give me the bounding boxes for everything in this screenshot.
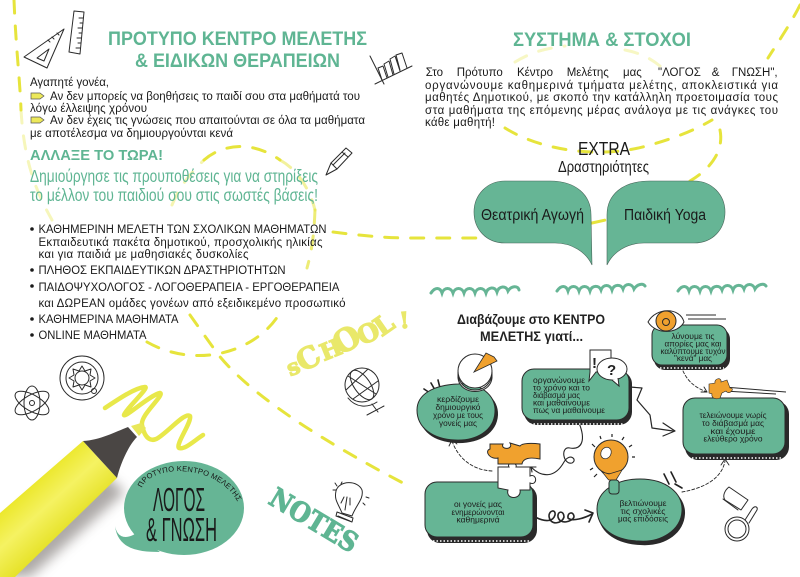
heading: change it now: ΑΛΛΑΞΕ ΤΟ ΤΩΡΑ! xyxy=(30,147,163,164)
flow node: solve questions xyxy=(652,325,730,370)
icon: sun in orbit xyxy=(60,356,104,400)
icon: ruler xyxy=(69,11,84,54)
flow node: organise time: το χρόνο και το xyxy=(533,384,591,392)
icon: set square xyxy=(24,29,64,68)
icon: speech bubbles with marks: ? xyxy=(607,362,616,379)
flow node: improve performance xyxy=(597,472,685,545)
decorative word: school: L xyxy=(368,308,401,343)
logo speech bubble xyxy=(115,461,244,555)
text block: system and goals: Στο xyxy=(426,67,443,79)
flow node: parents informed: οι γονείς μας xyxy=(454,500,502,509)
flow arrows xyxy=(449,371,729,523)
flow node: creative time with parents: γονείς μας xyxy=(439,419,477,428)
flow node: solve questions: απορίες μας και xyxy=(664,340,722,348)
extra activities heading xyxy=(558,139,649,176)
decorative word: school: ! xyxy=(398,308,410,334)
flowchart heading: Διαβάζουμε στο ΚΕΝΤΡΟ xyxy=(457,311,605,327)
title: left page xyxy=(108,29,367,72)
handwritten call to action: το μέλλον του παιδιού σου στις σωστές βάσεις! xyxy=(30,185,318,205)
text block: address to parents: Αν δεν μπορείς να βοηθήσεις το παιδί σου στα μαθήματά του xyxy=(50,91,360,103)
title: right page: ΣΥΣΤΗΜΑ & ΣΤΟΧΟΙ xyxy=(513,30,691,51)
flow node: improve performance: τις σχολικές xyxy=(620,507,666,516)
flow node: finish early: και έχουμε xyxy=(710,427,756,436)
services bullet list: ΚΑΘΗΜΕΡΙΝΗ ΜΕΛΕΤΗ ΤΩΝ ΣΧΟΛΙΚΩΝ ΜΑΘΗΜΑΤΩΝ xyxy=(38,224,326,236)
flow node: solve questions: λύνουμε τις xyxy=(672,332,715,341)
text block: system and goals: κάθε μαθητή! xyxy=(425,117,495,129)
text block: system and goals: Πρότυπο xyxy=(457,67,503,79)
flow node: solve questions: καλύπτουμε τυχόν xyxy=(660,347,726,356)
speech bubble: kids yoga: Παιδική Yoga xyxy=(624,207,706,224)
text block: system and goals: Μελέτης xyxy=(567,67,609,79)
highlighter scribble xyxy=(105,387,203,448)
flow node: creative time with parents: δημιουργικό xyxy=(436,403,481,412)
services bullet list: Εκπαιδευτικά πακέτα δημοτικού, προσχολικής ηλικίας xyxy=(38,237,323,249)
flowchart heading: ΜΕΛΕΤΗΣ γιατί... xyxy=(480,328,583,344)
flow node: finish early: τελειώνουμε νωρίς xyxy=(700,411,767,420)
flow node: finish early xyxy=(683,387,789,460)
services bullet list: ΚΑΘΗΜΕΡΙΝΑ ΜΑΘΗΜΑΤΑ xyxy=(38,314,179,326)
flow node: parents informed: ενημερώνονται xyxy=(452,508,505,517)
decorative word: school: C xyxy=(290,338,326,379)
extra activities heading: Δραστηριότητες xyxy=(558,159,649,176)
flow node: finish early: το διάβασμά μας xyxy=(702,419,764,428)
flow node: creative time with parents xyxy=(417,380,498,443)
logo speech bubble: ΠΡΟΤΥΠΟ ΚΕΝΤΡΟ ΜΕΛΕΤΗΣ xyxy=(138,466,242,502)
services bullet list: και για παιδιά με μαθησιακές δυσκολίες xyxy=(38,249,249,261)
text block: address to parents: Αγαπητέ γονέα, xyxy=(30,77,109,89)
flow node: organise time: οργανώνουμε xyxy=(533,376,586,385)
text block: address to parents: λόγω έλλειψης χρόνου xyxy=(30,103,147,115)
flow node: parents informed: καθημερινά xyxy=(456,516,500,524)
speech bubble: kids yoga xyxy=(607,181,725,265)
flow node: creative time with parents: χρόνο με τους xyxy=(433,411,483,420)
logo speech bubble: ΛΟΓΟΣ xyxy=(153,481,205,518)
decorative word: school: H xyxy=(316,333,346,367)
icon: orange bulb xyxy=(590,434,635,494)
flow node: improve performance: βελτιώνουμε xyxy=(620,499,667,508)
text block: system and goals: στα μαθήματα της επόμενης μέρας ανάλογα με τις ανάγκες του xyxy=(425,105,778,117)
speech bubble: theatre: Θεατρική Αγωγή xyxy=(481,207,584,224)
title: left page: ΠΡΟΤΥΠΟ ΚΕΝΤΡΟ ΜΕΛΕΤΗΣ xyxy=(108,29,367,50)
text block: system and goals: μαθητές Δημοτικού, με σκοπό την κατάλληλη προετοιμασία τους xyxy=(425,92,778,104)
flow node: organise time: διάβασμά μας xyxy=(533,391,580,400)
text block: address to parents: με αποτέλεσμα να δημιουργούνται κενά xyxy=(30,128,233,140)
handwritten call to action: Δημιούργησε τις προυποθέσεις για να στηρίξεις xyxy=(30,166,318,186)
speech bubble: theatre xyxy=(474,181,592,265)
text block: system and goals: "ΛΟΓΟΣ xyxy=(658,67,701,79)
decorative word: school: O xyxy=(326,318,368,363)
text block: system and goals: οργανώνουμε καθημερινά τμήματα μελέτης, αποκλειστικά για xyxy=(425,80,778,92)
icon: magnifying glass xyxy=(725,507,757,541)
icon: puzzle pieces xyxy=(488,443,540,498)
icon: tablet xyxy=(723,487,748,510)
handwritten call to action xyxy=(30,166,318,205)
text block: system and goals: & xyxy=(712,67,720,79)
decorative word: notes: NOTES xyxy=(263,482,363,559)
services bullet list: ONLINE ΜΑΘΗΜΑΤΑ xyxy=(38,330,147,342)
flow node: finish early: ελεύθερο χρόνο xyxy=(704,434,763,444)
decorative word: school: s xyxy=(283,353,304,382)
extra activities heading: EXTRA xyxy=(578,139,630,159)
text block: system and goals: ΓΝΩΣΗ", xyxy=(732,67,778,79)
flow node: organise time xyxy=(522,369,632,425)
highlighter pen xyxy=(0,423,146,577)
green squiggle dividers xyxy=(431,284,766,293)
services bullet list: και ΔΩΡΕΑΝ ομάδες γονέων από εξειδικεμένο προσωπικό xyxy=(38,298,346,310)
flow node: improve performance: μας επιδόσεις xyxy=(618,514,668,524)
flow node: organise time: πως να μαθαίνουμε xyxy=(533,406,605,415)
icon: globe xyxy=(345,366,384,415)
flow node: solve questions: "κενά" μας xyxy=(674,354,712,363)
flow node: parents informed xyxy=(425,482,537,543)
title: left page: & ΕΙΔΙΚΩΝ ΘΕΡΑΠΕΙΩΝ xyxy=(135,51,340,72)
text block: system and goals: μας xyxy=(623,67,642,79)
services bullet list: ΠΑΙΔΟΨΥΧΟΛΟΓΟΣ - ΛΟΓΟΘΕΡΑΠΕΙΑ - ΕΡΓΟΘΕΡΑΠΕΙΑ xyxy=(38,282,340,294)
text block: address to parents xyxy=(30,77,365,140)
icon: atom xyxy=(12,386,52,420)
services bullet list xyxy=(30,224,345,342)
icon: bar chart xyxy=(370,53,412,84)
icon: pencil xyxy=(326,148,352,175)
decorative word: school: O xyxy=(352,316,384,351)
decorative word: school xyxy=(283,308,410,382)
icon: eye xyxy=(648,311,726,331)
icon: light bulb outline xyxy=(333,482,369,522)
text block: system and goals: Κέντρο xyxy=(517,67,553,79)
icon: small puzzle piece xyxy=(709,379,732,399)
logo speech bubble: & ΓΝΩΣΗ xyxy=(146,511,217,548)
flow node: organise time: και μαθαίνουμε xyxy=(533,398,591,408)
flow node: creative time with parents: κερδίζουμε xyxy=(437,395,480,404)
text block: address to parents: Αν δεν έχεις τις γνώσεις που απαιτούνται σε όλα τα μαθήματα xyxy=(50,115,365,127)
flowchart heading xyxy=(457,311,605,344)
icon: speech bubbles with marks xyxy=(589,350,627,386)
icon: speech bubbles with marks: ! xyxy=(592,355,597,372)
services bullet list: ΠΛΗΘΟΣ ΕΚΠΑΙΔΕΥΤΙΚΩΝ ΔΡΑΣΤΗΡΙΟΤΗΤΩΝ xyxy=(38,265,286,277)
text block: system and goals xyxy=(425,67,778,129)
icon: pie chart xyxy=(458,353,497,392)
